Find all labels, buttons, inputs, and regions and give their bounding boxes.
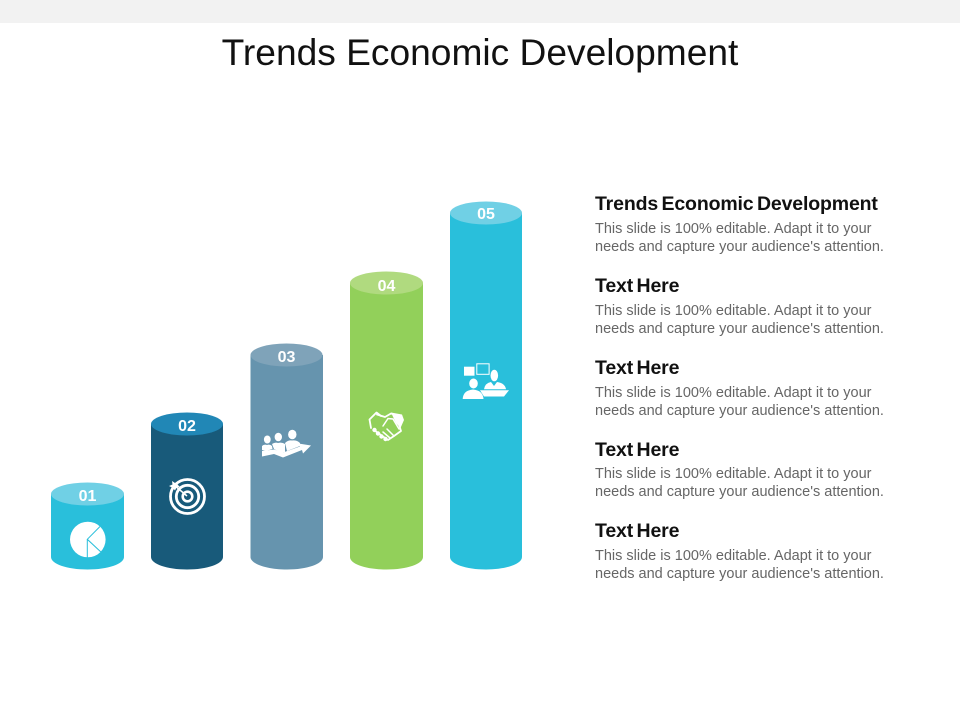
text block 4: Text Here [595,439,679,461]
icon: pie chart [70,522,106,558]
cylinder 03 [250,344,323,570]
cylinder 01 [51,482,124,570]
text block 4 [595,439,884,500]
text block 2: This slide is 100% editable. Adapt it to your [595,302,871,318]
top band [0,0,960,23]
title: Trends Economic Development [222,31,738,73]
text block: heading: needs and capture your audience's attention. [595,238,884,254]
text block 5: needs and capture your audience's attention. [595,566,884,582]
text block: heading [595,193,884,254]
icon: team with arrow [262,430,311,458]
text block 5: Text Here [595,520,679,542]
cylinder 05 [450,202,522,570]
cylinder 04 [350,272,423,570]
cylinder 05: 05 [477,206,495,223]
cylinder 04: 04 [378,278,396,295]
cylinder 02 [151,412,223,570]
text block 3: needs and capture your audience's attention. [595,402,884,418]
text block 2 [595,275,884,336]
icon: meeting [463,364,509,399]
icon: target [169,480,204,514]
text block 3 [595,357,884,418]
text block 2: needs and capture your audience's attention. [595,320,884,336]
cylinder 03: 03 [278,349,296,366]
text block 3: Text Here [595,357,679,379]
text block 4: needs and capture your audience's attention. [595,484,884,500]
text block: heading: Trends Economic Development [595,193,878,215]
text block 4: This slide is 100% editable. Adapt it to your [595,466,871,482]
text block 2: Text Here [595,275,679,297]
text block 5 [595,520,884,582]
text block 3: This slide is 100% editable. Adapt it to your [595,384,871,400]
icon: handshake [370,412,404,441]
text block: heading: This slide is 100% editable. Adapt it to your [595,220,871,236]
text block 5: This slide is 100% editable. Adapt it to your [595,548,871,564]
cylinder 01: 01 [79,488,96,505]
cylinder 02: 02 [178,418,196,435]
